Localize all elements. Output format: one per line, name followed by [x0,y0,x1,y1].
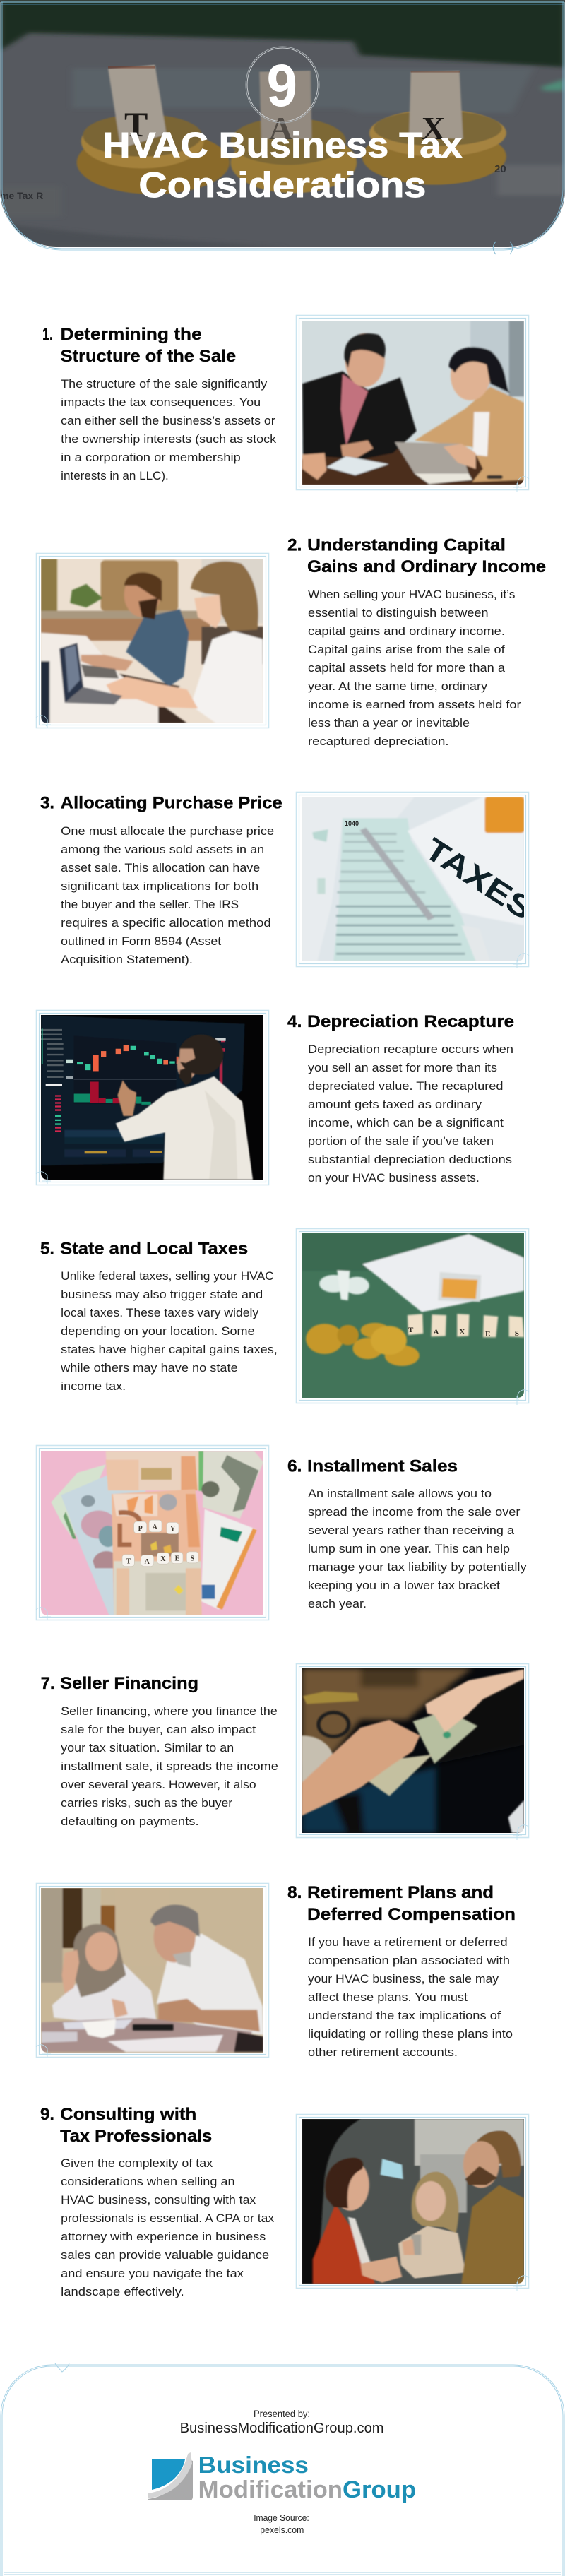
body text: and ensure you navigate the tax [61,2267,244,2280]
block letters: 20 [494,163,506,175]
title: Considerations [138,165,426,205]
body text: The structure of the sale significantly [61,378,268,391]
body text: local taxes. These taxes vary widely [61,1307,259,1319]
photo: coins, calculator and tax blocks on green: E [485,1331,490,1338]
body text: on your HVAC business assets. [308,1172,480,1185]
body text [308,1936,513,2059]
heading: 2. [287,535,302,555]
heading: Allocating Purchase Price [61,794,282,813]
body text: depreciated value. The recaptured [308,1080,503,1093]
body text: you sell an asset for more than its [308,1062,497,1074]
panel: step 9 consulting with tax professionals [40,2105,529,2298]
block letters: T [124,105,148,144]
header photo: tax coins on forms [0,0,565,247]
body text: attorney with experience in business [61,2231,266,2243]
body text: understand the tax implications of [308,2010,501,2022]
header banner [0,0,565,283]
body text [60,1270,278,1393]
photo: coins, calculator and tax blocks on green: X [459,1329,465,1336]
body text: spread the income from the sale over [308,1506,521,1519]
heading: 3. [40,794,54,813]
photo: coins, calculator and tax blocks on green: A [434,1329,439,1336]
body text: in a corporation or membership [61,451,241,464]
body text [61,825,274,966]
heading: Structure of the Sale [61,347,236,366]
photo: banknotes with pay taxes dice on pink: S [191,1555,195,1563]
body text: compensation plan associated with [308,1954,510,1967]
panel: step 4 depreciation recapture [36,1010,514,1185]
panel: step 8 retirement plans and deferred compensation [36,1883,516,2059]
heading: 6. [287,1456,302,1476]
body text: Unlike federal taxes, selling your HVAC [61,1270,274,1283]
footer panel [1,2363,564,2576]
body text: portion of the sale if you’ve taken [308,1135,494,1148]
photo: banknotes with pay taxes dice on pink [36,1445,268,1620]
body text: among the various sold assets in an [61,843,264,856]
header frame lines [1,2,564,254]
wooden blocks [108,65,167,148]
photo: banknotes with pay taxes dice on pink: P [138,1525,143,1533]
body text: several years rather than receiving a [308,1524,515,1537]
body text: sale for the buyer, can also impact [61,1723,256,1736]
heading: 5. [40,1239,54,1258]
body text: One must allocate the purchase price [61,825,274,838]
body text: Acquisition Statement). [61,954,193,966]
photo: older couple reviewing paperwork [36,1883,268,2057]
heading: Determining the [61,325,202,344]
photo: banknotes with pay taxes dice on pink: A [145,1558,150,1566]
presented by: Presented by: [254,2409,310,2419]
body text: income, which can be a significant [308,1117,504,1129]
block letters: X [422,110,445,146]
body text: Seller financing, where you finance the [61,1705,278,1718]
number badge [246,47,319,123]
body text: landscape effectively. [61,2286,184,2298]
body text: sales can provide valuable guidance [61,2249,269,2262]
photo: man pointing at trading chart [36,1010,268,1185]
body text: capital assets held for more than a [308,662,506,675]
image source: Image Source: [254,2512,309,2523]
heading: Gains and Ordinary Income [307,557,546,576]
heading: State and Local Taxes [60,1239,248,1258]
logo icon [148,2452,193,2500]
body text [308,588,521,748]
image source: pexels.com [260,2524,304,2535]
photo: business meeting [297,315,529,492]
body text: defaulting on payments. [61,1815,199,1828]
panel: step 7 seller financing [41,1664,529,1840]
photo: coins, calculator and tax blocks on green: S [515,1331,519,1338]
body text: Depreciation recapture occurs when [308,1043,513,1056]
photo: banknotes with pay taxes dice on pink: Y [170,1525,176,1533]
heading: Deferred Compensation [307,1905,516,1924]
body text: When selling your HVAC business, it’s [308,588,515,601]
body text: essential to distinguish between [308,607,489,619]
block letters: me Tax R [0,190,43,201]
body text: affect these plans. You must [308,1991,468,2004]
presented by [180,2409,384,2436]
heading [287,535,546,576]
heading [42,325,236,366]
text on envelope in the photo: TAXES [419,831,539,927]
body text: considerations when selling an [61,2176,235,2188]
photo: three colleagues talking [297,2115,529,2291]
heading: Retirement Plans and [307,1883,494,1902]
body text [61,2157,275,2298]
body text [61,1705,278,1828]
block letters [1,113,506,199]
photo: tax forms with envelope [297,793,539,968]
coin stacks [76,140,230,195]
heading: 8. [287,1883,302,1902]
body text: lump sum in one year. This can help [308,1543,510,1555]
title [102,126,463,205]
body text: states have higher capital gains taxes, [61,1343,278,1356]
logo: Business Modification Group: Business [198,2452,309,2479]
body text: the ownership interests (such as stock [61,433,277,446]
body text: capital gains and ordinary income. [308,625,505,638]
logo: Business Modification Group: Modification [198,2476,343,2503]
body text: keeping you in a lower tax bracket [308,1579,500,1592]
photo: coins, calculator and tax blocks on green [297,1229,529,1405]
panel: step 2 understanding capital gains and ordinary income [36,535,546,748]
heading: 1. [42,325,53,344]
body text: asset sale. This allocation can have [61,862,260,874]
heading: 9. [40,2105,54,2124]
body text: your HVAC business, the sale may [308,1973,499,1986]
heading [287,1883,516,1924]
body text: manage your tax liability by potentially [308,1561,528,1574]
number badge: 9 [267,52,297,119]
logo: Business Modification Group [148,2452,416,2503]
block letters: A [269,110,292,146]
body text: year. At the same time, ordinary [308,680,488,693]
logo: Business Modification Group: Group [343,2476,416,2503]
body text: significant tax implications for both [61,880,258,893]
panel: step 3 allocating purchase price [40,793,539,968]
heading: Understanding Capital [307,535,506,555]
body text: carries risks, such as the buyer [61,1797,233,1810]
photo: banknotes with pay taxes dice on pink: A [153,1524,158,1531]
text on envelope in the photo: 1040 [345,820,359,827]
body text: can either sell the business’s assets or [61,415,275,427]
body text: An installment sale allows you to [308,1488,492,1500]
heading [40,2105,212,2146]
body text: each year. [308,1598,367,1610]
heading: Consulting with [60,2105,196,2124]
heading: Tax Professionals [60,2127,212,2146]
body text: business may also trigger state and [61,1288,263,1301]
body text: Capital gains arise from the sale of [308,643,505,656]
body text: impacts the tax consequences. You [61,396,261,409]
body text: professionals is essential. A CPA or tax [61,2212,275,2225]
heading: Installment Sales [307,1456,458,1476]
body text: less than a year or inevitable [308,717,470,730]
body text: depending on your location. Some [61,1325,255,1338]
body text: installment sale, it spreads the income [61,1760,278,1773]
body text: interests in an LLC). [61,470,169,482]
heading: 4. [287,1012,302,1031]
heading: Seller Financing [60,1674,198,1693]
body text [61,378,277,482]
body text: Given the complexity of tax [61,2157,213,2170]
body text: If you have a retirement or deferred [308,1936,508,1949]
panel: step 1 determining the structure of the sale [42,315,529,492]
image source [254,2512,309,2535]
panel: step 6 installment sales [36,1445,528,1620]
body text: over several years. However, it also [61,1779,256,1791]
photo: banknotes with pay taxes dice on pink: T [126,1558,131,1566]
body text: requires a specific allocation method [61,917,271,930]
photo: people working on laptops [36,554,268,728]
photo: coins, calculator and tax blocks on green: T [408,1327,413,1334]
heading: 7. [41,1674,55,1693]
title: HVAC Business Tax [102,126,463,165]
presented by: BusinessModificationGroup.com [180,2421,384,2436]
footer frame [1,2363,564,2576]
photo: banknotes with pay taxes dice on pink: E [175,1555,180,1563]
body text: the buyer and the seller. The IRS [61,898,239,911]
body text: other retirement accounts. [308,2046,458,2059]
body text: substantial depreciation deductions [308,1153,512,1166]
text on envelope in the photo [345,820,539,927]
body text: income is earned from assets held for [308,699,521,711]
body text: amount gets taxed as ordinary [308,1098,482,1111]
heading: Depreciation Recapture [307,1012,514,1031]
photo: hands exchanging cash [297,1664,529,1840]
photo: banknotes with pay taxes dice on pink: X [160,1555,166,1563]
body text: outlined in Form 8594 (Asset [61,935,222,948]
body text [308,1488,528,1610]
body text: while others may have no state [60,1362,238,1375]
body text: recaptured depreciation. [308,735,449,748]
body text: HVAC business, consulting with tax [61,2194,256,2207]
panel: step 5 state and local taxes [40,1229,529,1405]
body text: your tax situation. Similar to an [61,1742,234,1755]
body text: liquidating or rolling these plans into [308,2028,513,2041]
body text [308,1043,513,1185]
body text: income tax. [61,1380,126,1393]
